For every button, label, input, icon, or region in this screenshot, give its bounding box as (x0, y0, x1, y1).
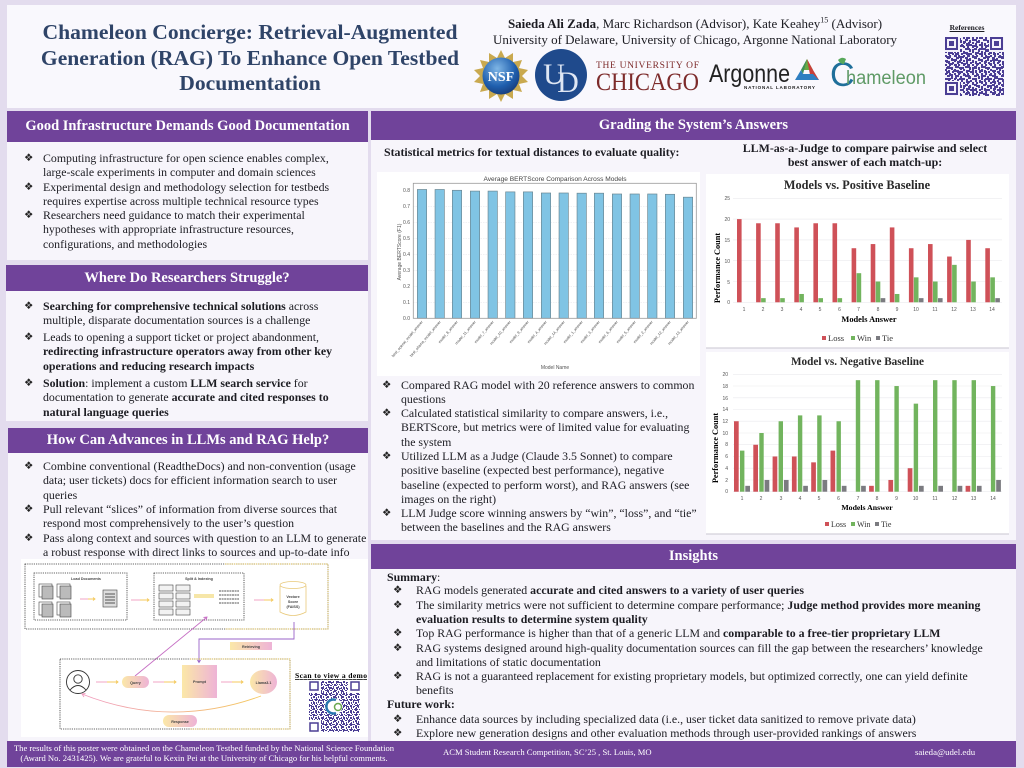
y axis labels: 10 (722, 431, 728, 437)
node: llama: Llama3.1 (256, 681, 271, 685)
legend: Loss (831, 520, 846, 529)
y axis labels: 0 (727, 300, 730, 306)
bullet: RAG is not: benefits (416, 683, 454, 697)
panel: where researchers struggle (6, 265, 368, 421)
heading: good infrastructure: Good Infrastructure Demands Good Documentation (25, 118, 350, 134)
y axis labels: 0.4 (403, 252, 410, 258)
x axis labels: 4 (800, 307, 803, 313)
heading: insights: Insights (669, 548, 718, 564)
bullet: leads to: Leads to opening a support ticket or project abandonment, (43, 330, 319, 344)
bullet: similarity metrics: The similarity metrics were not sufficient to determine compare performance; Judge method provides more meaning (416, 598, 980, 612)
bullet: leads to: operations and reducing research impacts (43, 359, 254, 373)
node: llama (250, 670, 277, 694)
references label: References (950, 23, 984, 32)
outer indexing box (25, 564, 328, 629)
acknowledgement: The results of this poster were obtained on the Chameleon Testbed funded by the National Science Foundation (14, 743, 394, 753)
x axis labels: model_1_answer (563, 319, 584, 344)
x axis labels: 4 (799, 496, 802, 502)
bullet: enhance data: Enhance data sources by including specialized data (i.e., user ticket data sanitized to remove private data) (416, 712, 916, 726)
x axis labels: 12 (952, 496, 957, 502)
authors: University of Delaware, University of Chicago, Argonne National Laboratory (493, 32, 897, 47)
axis title: performance count: Performance Count (713, 233, 722, 303)
bullet: calculated similarity (401, 406, 689, 449)
legend (822, 333, 893, 343)
x axis labels: model_3_answer (580, 319, 601, 344)
logo: Chameleon: hameleon (846, 68, 926, 89)
node: query (122, 676, 149, 688)
x axis labels (741, 496, 996, 502)
authors: Saieda Ali Zada, Marc Richardson (Advisor), Kate Keahey15 (Advisor) (508, 16, 882, 31)
bullet: RAG models: RAG models generated accurate and cited answers to a variety of user queries (416, 583, 804, 597)
bullet: calculated similarity: Calculated statistical similarity to compare answers, i.e., (401, 406, 668, 420)
title: Chameleon Concierge: Retrieval-Augmented (42, 20, 457, 44)
node: query: Query (130, 681, 142, 685)
header panel (7, 5, 1016, 108)
bars (417, 190, 693, 318)
label: retrieving (230, 642, 272, 650)
y axis labels (403, 188, 410, 322)
logo: Argonne: Argonne (709, 60, 790, 88)
y axis labels: 0.7 (403, 204, 410, 210)
flow arrows: indexing (80, 598, 273, 602)
label: retrieving: Retrieving (242, 645, 260, 649)
bullet: pass along (43, 531, 366, 560)
bullet: researchers need guidance (43, 208, 305, 251)
x axis labels: model_11_answer (455, 319, 477, 346)
bullet: experimental design: requires expertise across multiple technical resource types (43, 194, 319, 208)
legend: Win (857, 520, 870, 529)
chart title: Average BERTScore Comparison Across Models (483, 176, 627, 183)
logo: NSF: NSF (488, 70, 514, 85)
bullet: RAG systems: RAG systems designed around high-quality documentation sources can fill the gap between the researchers’ knowledge (416, 641, 983, 655)
x axis labels: 1 (743, 307, 746, 313)
x axis labels: 12 (951, 307, 957, 313)
bullet: searching (43, 299, 318, 328)
x axis labels: model_13_answer (667, 319, 690, 346)
y axis labels: 0.2 (403, 284, 410, 290)
panel: insights (371, 544, 1016, 741)
y axis labels: 5 (727, 280, 730, 286)
query flow box (60, 659, 290, 729)
axis title: models answer: Models Answer (841, 315, 897, 324)
bullet: solution: documentation to generate accurate and cited responses to (43, 390, 329, 404)
bullet: utilized LLM: images on the right) (401, 492, 496, 506)
x axis labels: 14 (990, 496, 996, 502)
x axis labels (743, 307, 995, 313)
data bars (737, 219, 1000, 302)
y axis labels: 16 (722, 396, 728, 402)
x axis labels: 2 (762, 307, 765, 313)
bullet: calculated similarity: BERTScore, but metrics were of limited value for evaluating (401, 420, 689, 434)
y axis labels: 14 (722, 407, 728, 413)
bullet: combine: queries (43, 488, 77, 502)
bullet: utilized LLM (401, 449, 689, 506)
bullet: utilized LLM: baseline (expected to perform worst), and RAG answers (see (401, 478, 689, 492)
x axis labels: 8 (876, 496, 879, 502)
bullet: RAG is not (416, 669, 968, 698)
x axis labels: 6 (837, 496, 840, 502)
y axis labels: 12 (722, 419, 728, 425)
y axis labels: 8 (725, 442, 728, 448)
y axis labels: 2 (725, 478, 728, 484)
node: response: Response (171, 720, 189, 724)
heading: insights (371, 544, 1016, 569)
bullet: pass along: Pass along context and sources with question to an LLM to generate (43, 531, 366, 545)
bullet: pull slices: respond most comprehensively to the user’s question (43, 516, 294, 530)
title (41, 20, 459, 95)
panel: grading the system's answers (371, 111, 1016, 540)
bullet: researchers need guidance: hypotheses with appropriate infrastructure resources, (43, 222, 294, 236)
bullet: compared RAG: questions (401, 392, 446, 406)
bullet: RAG is not: RAG is not a guaranteed replacement for existing proprietary models, but optimized correctly, one can yield definite (416, 669, 968, 683)
logo: Chameleon: C (830, 56, 855, 94)
bullet: LLM judge score: LLM Judge score winning answers by “win”, “loss”, and “tie” (401, 506, 697, 520)
bullet: explore: Explore new generation designs and other evaluation methods through user-provided rankings of answers (416, 726, 916, 740)
bullet: experimental design (43, 180, 329, 209)
x axis labels: 3 (781, 307, 784, 313)
node: prompt: Prompt (193, 680, 207, 684)
load documents box: Load Documents (71, 577, 101, 581)
flow arrows: query (82, 680, 261, 712)
legend: Loss (828, 333, 844, 343)
y axis labels (724, 196, 730, 306)
y axis labels (722, 372, 728, 495)
label: summary: Summary: (387, 570, 440, 584)
title: Documentation (179, 71, 321, 95)
bullet: RAG systems: and limitations of static documentation (416, 655, 601, 669)
vector store cylinder: (FAISS) (286, 605, 300, 609)
x axis labels: model_5_answer (616, 319, 637, 344)
y axis labels: 0.0 (403, 316, 410, 322)
heading: advances in LLMs (8, 428, 368, 453)
axis title: models answer: Models Answer (841, 503, 893, 512)
bullet: combine: data; user tickets) docs for efficient information search to user (43, 473, 337, 487)
x axis labels: best_ollama_model_answer (409, 319, 442, 358)
bullet: searching: Searching for comprehensive technical solutions across (43, 299, 318, 313)
logo: University of Chicago: CHICAGO (596, 67, 699, 96)
x axis labels: 5 (819, 307, 822, 313)
conference: ACM Student Research Competition, SC’25 , St. Louis, MO (443, 747, 652, 757)
y axis labels: 6 (725, 454, 728, 460)
bullet: experimental design: Experimental design and methodology selection for testbeds (43, 180, 329, 194)
y axis labels: 0.8 (403, 188, 410, 194)
vector store cylinder (280, 582, 306, 616)
bullet: computing infrastructure: Computing infrastructure for open science enables complex, (43, 151, 329, 165)
subheading: LLM as a judge (742, 141, 988, 169)
bullet: solution: natural language queries (43, 405, 169, 419)
bullet: LLM judge score (401, 506, 697, 535)
arrow: query to index (135, 617, 207, 676)
y axis labels: 20 (724, 217, 730, 223)
bullet: similarity metrics (416, 598, 980, 627)
bullet: RAG systems (416, 641, 983, 670)
logo: Chameleon (830, 56, 926, 94)
load documents box (34, 573, 127, 620)
heading: grading (371, 111, 1016, 140)
node: prompt (182, 665, 217, 698)
bullet: researchers need guidance: Researchers need guidance to match their experimental (43, 208, 305, 222)
QR code: references (945, 37, 1004, 96)
y axis labels: 0.6 (403, 220, 410, 226)
bullet: top RAG: Top RAG performance is higher than that of a generic LLM and comparable to a free-tier proprietary LLM (416, 626, 940, 640)
logo: University of Delaware: U (543, 58, 565, 91)
x axis labels: model_7_answer (474, 319, 495, 344)
bullet: leads to: redirecting infrastructure operators away from other key (43, 344, 332, 358)
footer (7, 741, 1016, 767)
bullet: solution: Solution: implement a custom LLM search service for (43, 376, 308, 390)
y axis labels: 20 (722, 372, 728, 378)
bullet: pull slices: Pull relevant “slices” of information from diverse sources that (43, 502, 337, 516)
bullet: compared RAG: Compared RAG model with 20 reference answers to common (401, 378, 694, 392)
subheading: LLM as a judge: best answer of each match-up: (788, 155, 942, 169)
split and indexing box: Split & Indexing (185, 577, 213, 581)
bar chart: model vs negative baseline (706, 352, 1009, 534)
heading: good infrastructure (7, 111, 368, 142)
legend (825, 520, 892, 529)
bullet: solution (43, 376, 329, 419)
bullet: calculated similarity: the system (401, 435, 451, 449)
bullet: LLM judge score: between the baselines and the RAG answers (401, 520, 611, 534)
x axis labels: 14 (989, 307, 995, 313)
x axis labels: 11 (932, 307, 938, 313)
heading: advances in LLMs: How Can Advances in LLMs and RAG Help? (47, 432, 329, 448)
y axis title: Average BERTScore (F1) (397, 223, 403, 280)
y axis labels: 0.1 (403, 300, 410, 306)
bullet: searching: multiple, disparate documentation sources is a challenge (43, 313, 310, 327)
bullet: combine: Combine conventional (ReadtheDocs) and non-convention (usage (43, 459, 356, 473)
data bars (734, 380, 1001, 492)
y axis labels: 25 (724, 196, 730, 202)
node: response (163, 715, 197, 727)
x axis labels: 10 (913, 496, 918, 502)
x axis labels: 9 (896, 307, 899, 313)
x axis labels: 7 (857, 496, 860, 502)
panel: good infrastructure (7, 111, 368, 260)
x axis labels: model_10_answer (489, 319, 512, 346)
RAG architecture diagram (21, 559, 368, 737)
x axis labels: 9 (895, 496, 898, 502)
bar chart: models vs positive baseline (706, 174, 1009, 348)
legend: Win (857, 333, 872, 343)
x axis labels: model_9_answer (509, 319, 530, 344)
heading: grading: Grading the System’s Answers (599, 117, 788, 133)
logos row (474, 49, 926, 102)
x axis labels: model_6_answer (598, 319, 619, 344)
x axis labels: model_12_answer (649, 319, 672, 346)
x axis labels (391, 319, 690, 358)
bullet: combine (43, 459, 356, 502)
authors (493, 16, 897, 47)
y axis labels: 10 (724, 259, 730, 265)
x axis labels: 10 (913, 307, 919, 313)
label: scan to view a demo: Scan to view a demo (295, 671, 367, 680)
bullet: utilized LLM: Utilized LLM as a Judge (Claude 3.5 Sonnet) to compare (401, 449, 673, 463)
x axis title: Model Name (541, 365, 569, 371)
x axis labels: model_2_answer (633, 319, 654, 344)
y axis labels: 0.3 (403, 268, 410, 274)
y axis labels: 0 (725, 489, 728, 495)
legend: Tie (882, 333, 893, 343)
bullet: similarity metrics: evaluation results to determine system quality (416, 612, 648, 626)
x axis labels: model_4_answer (527, 319, 548, 344)
bullet: leads to (43, 330, 332, 373)
bullet: computing infrastructure (43, 151, 329, 180)
y axis labels: 15 (724, 238, 730, 244)
legend: Tie (881, 520, 892, 529)
logo: University of Delaware (535, 49, 587, 101)
x axis labels: 2 (760, 496, 763, 502)
panel: advances in LLMs and RAG (8, 428, 368, 741)
bar chart: average BERTScore (377, 172, 700, 376)
acknowledgement: (Award No. 2431425). We are grateful to Kexin Pei at the University of Chicago for his helpful comments. (20, 753, 388, 763)
y axis labels: 0.5 (403, 236, 410, 242)
bullet: utilized LLM: positive baseline (expected best performance), negative (401, 463, 664, 477)
arrow: retrieving path (198, 622, 294, 662)
vector store cylinder: Vectore (286, 595, 300, 599)
x axis labels: 11 (932, 496, 938, 502)
email: saieda@udel.edu (915, 747, 975, 757)
icon: user (66, 670, 90, 694)
bullet: researchers need guidance: configurations, and methodologies (43, 237, 207, 251)
logo: Argonne: NATIONAL LABORATORY (744, 85, 815, 90)
x axis labels: 1 (741, 496, 744, 502)
subheading: LLM as a judge: LLM-as-a-Judge to compare pairwise and select (743, 141, 987, 155)
y axis labels: 4 (725, 466, 728, 472)
x axis labels: 8 (877, 307, 880, 313)
QR code: demo (309, 681, 360, 732)
subheading: statistical metrics: Statistical metrics for textual distances to evaluate quality: (384, 145, 680, 159)
y axis labels: 18 (722, 384, 728, 390)
chart title: Models vs. Positive Baseline (784, 178, 931, 192)
x axis labels: 13 (970, 307, 976, 313)
title: Generation (RAG) To Enhance Open Testbed (41, 46, 459, 70)
label: future work: Future work: (387, 697, 455, 711)
bullet: pass along: a robust response with direct links to sources and up-to-date info (43, 545, 350, 559)
heading: where researchers struggle: Where Do Researchers Struggle? (84, 270, 290, 286)
x axis labels: 6 (838, 307, 841, 313)
chart title: Model vs. Negative Baseline (791, 356, 924, 368)
x axis labels: best_openai_model_answer (391, 319, 424, 358)
split and indexing box (154, 573, 244, 620)
logo: University of Chicago: THE UNIVERSITY OF (596, 61, 699, 71)
bullet: computing infrastructure: large-scale experiments in computer and domain sciences (43, 165, 316, 179)
x axis labels: model_8_answer (438, 319, 459, 344)
x axis labels: model_14_answer (543, 319, 566, 346)
x axis labels: 3 (780, 496, 783, 502)
axis title: performance count: Performance Count (711, 413, 720, 483)
logo: University of Delaware: D (557, 66, 579, 99)
x axis labels: 13 (971, 496, 976, 502)
logo: NSF (474, 50, 528, 102)
bullet: pull slices (43, 502, 337, 531)
acknowledgement (14, 743, 394, 763)
bullet: compared RAG (401, 378, 694, 407)
vector store cylinder: Score (288, 600, 298, 604)
x axis labels: 7 (857, 307, 860, 313)
x axis labels: 5 (818, 496, 821, 502)
heading: where researchers struggle (6, 265, 368, 291)
